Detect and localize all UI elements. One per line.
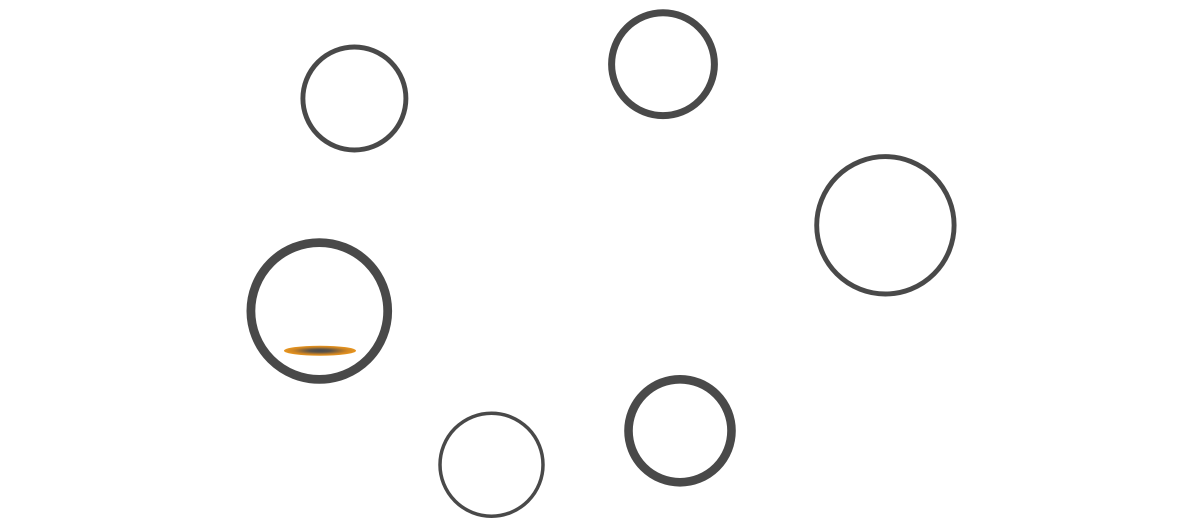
ellipse: orange and grey shadow — [284, 346, 356, 356]
ring: bottom centre — [440, 413, 543, 516]
ring: bottom right — [628, 379, 732, 482]
ring: top left — [303, 47, 406, 150]
ring: left with ellipse — [251, 243, 388, 379]
ring: top centre — [612, 13, 714, 116]
ring: right — [817, 157, 954, 294]
